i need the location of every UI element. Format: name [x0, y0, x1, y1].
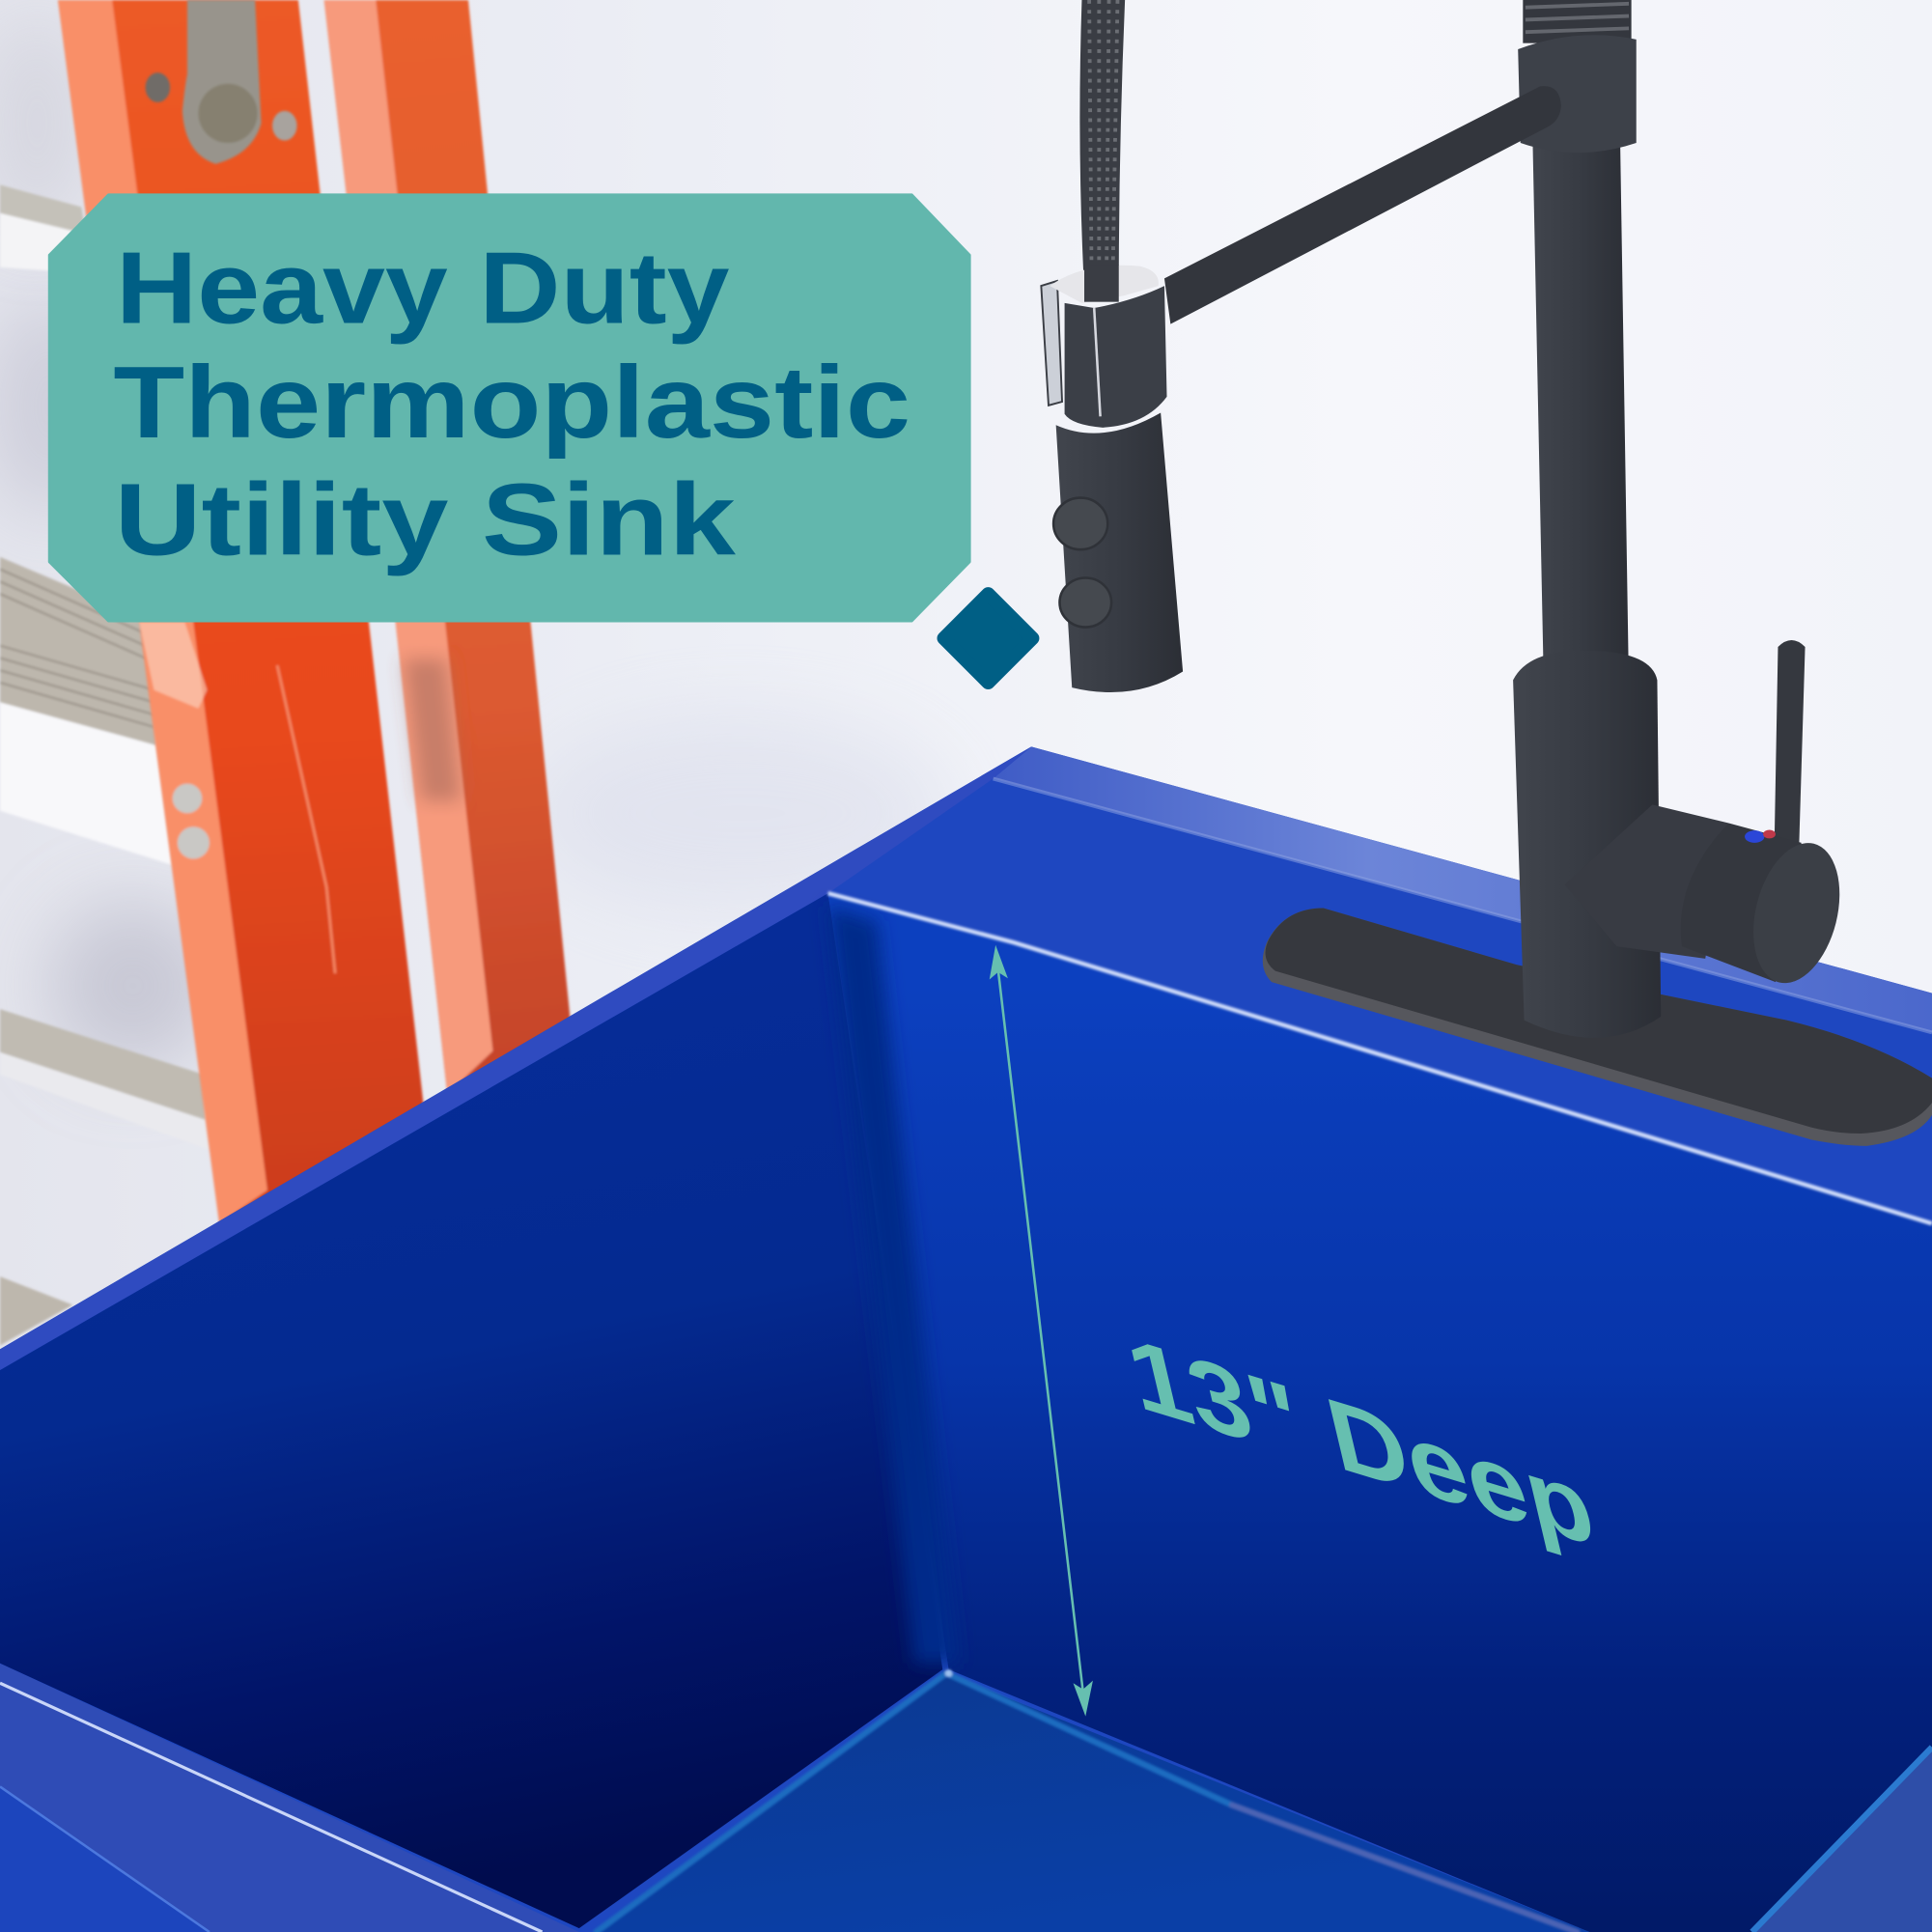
floor edges highlight [597, 1669, 1577, 1932]
faucet: upper collar [1518, 35, 1637, 153]
basin corner crease [828, 906, 959, 1664]
sink basin [0, 893, 1932, 1932]
faucet: holder collar [1041, 265, 1167, 428]
arrow: depth dimension [990, 945, 1093, 1717]
sink: deck and rim [0, 746, 1932, 1932]
sink: front rim [0, 1664, 579, 1932]
sink: right corner rim [1752, 1748, 1932, 1932]
heading: product title [113, 231, 910, 576]
faucet: lever stem [1775, 640, 1806, 851]
icon: teal diamond marker [944, 594, 1032, 683]
heading: product title: Thermoplastic [113, 346, 910, 460]
back rim highlight [828, 893, 1932, 1223]
faucet deck plate [1263, 909, 1932, 1146]
left basin wall [0, 893, 942, 1928]
faucet: braided hose [1079, 0, 1125, 290]
faucet [1041, 0, 1853, 1038]
basin floor [594, 1673, 1589, 1932]
faucet: pole [1533, 147, 1629, 690]
ladder: front rail [58, 0, 424, 1223]
faucet: spray head [1053, 413, 1183, 692]
faucet: swing arm [1164, 86, 1561, 324]
ladder: rear rail [324, 0, 571, 1094]
ladder: metal bracket and bolt [146, 0, 297, 164]
ladder steps [0, 184, 211, 1346]
back basin wall [828, 893, 1932, 1932]
heading: product title: Utility Sink [115, 462, 736, 576]
faucet: base cylinder [1513, 651, 1661, 1038]
label: 13 inch deep: 13" Deep [1117, 1315, 1605, 1570]
faucet: coil spring [1523, 0, 1632, 43]
faucet: handle [1565, 804, 1853, 993]
heading: product title: Heavy Duty [116, 231, 730, 345]
callout: heading panel [49, 195, 969, 621]
